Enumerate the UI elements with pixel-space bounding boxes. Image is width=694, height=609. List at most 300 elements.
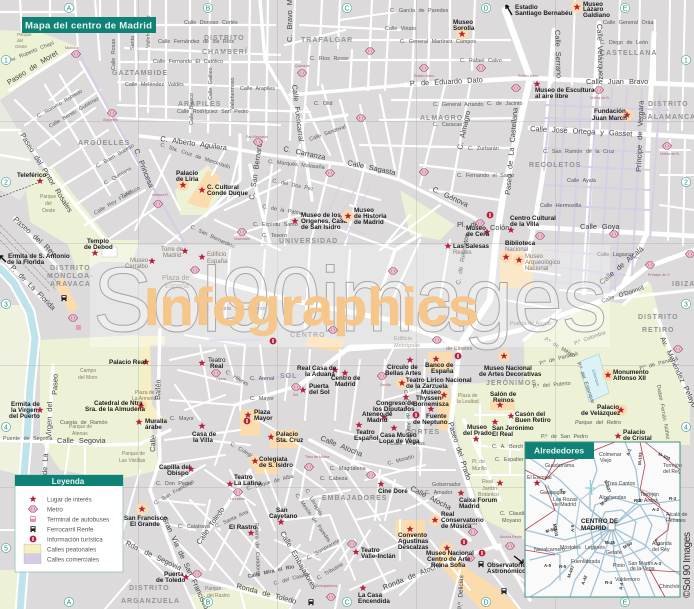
POI: Real Casa de la Aduana [297,365,339,378]
lake Estanque [579,354,609,402]
POI: Museo de Historia: Museo [354,207,374,214]
inset: place names: de la Vega [630,566,655,572]
POI: Puerta del Sol: del Sol [309,389,330,396]
POI: Real Casa de la Aduana: Real Casa de [297,365,337,372]
metro names: Quevedo [295,64,310,68]
inset: road codes: A-5 [544,563,552,568]
minor street names: Atenas [72,431,88,437]
POI: Cultural Conde Duque: Conde Duque [207,190,248,197]
main street names: de La [40,452,50,475]
river Manzanares [0,268,35,609]
minor street names: Parque [17,32,32,37]
POI: San Francisco El Grande: San Francisco [124,515,167,522]
inset: road codes: M-50 [622,540,634,550]
POI: Convento Agustinas Descalzas [398,523,429,551]
main street names: Paseo de La Castellana [503,106,520,195]
minor street names: C. Colegiata [229,442,259,463]
POI: Palacio de Velázquez: Palacio [597,404,619,411]
POI: Cine Doré: Cine Doré [378,488,408,495]
POI: Teatro Valle-Inclán [352,547,396,560]
metro names: Atocha Renfe [500,535,522,539]
district labels: JERÓNIMOS [486,378,537,387]
POI: Caixa Forum Madrid: Caixa Forum [459,497,498,504]
POI: Templo de Debod: Templo [87,238,109,245]
minor street names: C. Claudio [500,511,527,517]
inset: place names: Guadarrama [545,463,574,469]
POI: Las Salesas: Las Salesas [453,243,490,250]
legend: ferrocarril Renfe: Ferrocarril Renfe [47,526,94,534]
grid references: top letters: D [483,5,489,12]
POI: Palacio de Velázquez [581,404,627,417]
POI: Banco de España: Banco de [425,362,454,369]
POI: Muralla árabe [135,418,168,431]
minor street names: C. Caracas [433,122,462,128]
metro names: Ventura R. [152,193,169,197]
minor street names: C. Mayor [250,396,274,402]
minor street names: C. Fernando el Santo [457,173,514,179]
POI: Templo de Debod: de Debod [84,244,113,251]
inset: road codes: R-4 [605,580,613,585]
POI: Ateneo de Madrid: Madrid [367,417,388,424]
minor street names: Edificio [394,336,412,342]
POI: Banco de España [425,353,454,375]
POI: San Jerónimo El Real: San Jerónimo [492,425,534,432]
minor street names: Plaza de [162,275,189,282]
minor street names: Calle Fernández de los Ríos [158,39,234,45]
POI: Centro Cultural de la Villa: Centro Cultural [510,215,556,222]
POI: Banco de España: España [431,368,454,375]
POI: Palacio de Liria [176,170,199,191]
POI: Monumento Alfonso XII: Alfonso XII [613,375,646,382]
inset: place names: Colmenar [599,452,622,458]
POI: Museo de Escultura: Museo de Escultura [535,87,595,94]
legend: calles peatonales: Calles peatonales [47,546,96,554]
inset: place names: Navalcarnero [534,547,565,553]
grid references: side numbers: 3 [684,301,688,308]
minor street names: C. Don Pedro [156,481,193,487]
POI: Teatro Real: Teatro [208,357,226,364]
POI: La Casa Encendida [358,584,390,605]
POI: Real Conservatorio de Música: Real [441,511,455,518]
POI: Casón del Buen Retiro: Casón del [515,411,545,418]
inset: place names: Viejo [600,458,612,464]
minor street names: C. General Martínez Campos [400,39,476,45]
POI: Real Conservatorio de Música [429,511,484,530]
POI: San Cayetano: Cayetano [269,513,297,520]
district labels: CHAMBERÍ [202,47,248,56]
POI: Convento Agustinas Descalzas: Agustinas [398,538,429,545]
POI: Museo de Cera [466,225,491,238]
inset: motorways [525,442,680,597]
inset: road codes: M-607 [603,480,612,494]
minor street names: C. del Dos Pez [272,178,314,193]
grid references: top letters: E [623,5,628,12]
minor street names: Parque del Retiro [575,420,621,426]
inset: road codes: A-42 [580,574,588,585]
POI: Edificio España [198,252,228,265]
POI: Teatro La Latina: Teatro [234,474,253,481]
POI: Observatorio Astronómico [478,556,526,575]
POI: Museo Sorolla: Sorolla [453,25,475,32]
POI: Palacio de Liria: de Liria [176,176,199,183]
district labels: ARAVACA [50,281,91,288]
POI: San Jerónimo El Real [491,418,534,438]
panel: inset map Alrededores [525,442,687,597]
district labels: EMBAJADORES [322,495,387,502]
inset: road codes: R-5 [559,564,567,569]
POI: Ermita Virgen del Puerto: Ermita de [11,401,40,408]
district labels: TRAFALGAR [301,37,353,44]
metro names: Argüelles [103,118,118,122]
POI: Centro de Madrid: Centro de [331,375,361,382]
minor street names: Ribera de Curtidores [253,523,261,577]
minor street names: Calle Huertas [390,441,425,447]
POI: Las Salesas [444,242,490,256]
POI: Teatro La Latina: La Latina [234,480,262,487]
POI: Estadio Santiago Bernabéu: Estadio [515,4,538,11]
POI: Puerta del Sol: Puerta [309,383,329,390]
inset: road codes: A-2 [652,507,660,512]
panel: legend [15,475,123,572]
inset: place names: Valdemoro [615,577,640,583]
POI: Ermita de S. Antonio [0,253,70,266]
metro names: Noviciado [234,237,250,241]
minor street names: Calle Hermosilla [540,203,581,209]
inset: place names: de Madrid [553,502,576,508]
inset: road codes [544,447,677,590]
POI: Real Conservatorio de Música: Conservatorio [441,517,484,524]
minor street names: C. Olid [314,101,332,107]
POI: Torre de Madrid: Madrid [163,253,181,259]
main street names: Virgen del [44,401,54,438]
POI: Casa de la Villa: la Villa [193,437,213,444]
minor street names: C. Romero Robledo [36,89,84,120]
POI: Casón del Buen Retiro [507,411,551,424]
railway lines [0,225,60,292]
POI: Cine Doré [377,480,408,495]
inset: road codes: M-501 [545,526,559,534]
minor street names: C. Lavapiés [303,488,324,518]
district labels: ALMAGRO [420,115,463,122]
POI: Museo Reina Sofía: Reina Sofía [431,562,466,569]
main street names: Calle Juan Bravo [586,77,648,86]
POI: Convento Agustinas Descalzas: Convento [398,532,427,539]
main street names: Calle Atocha [409,484,454,512]
POI: Palacio de Velázquez: de Velázquez [581,410,620,417]
minor street names: P.º de Méjico [543,337,576,359]
POI: Cultural Conde Duque: C. Cultural [207,184,239,191]
POI: Museo Cerralbo: Museo [130,258,149,264]
POI: Salón de Reinos: Reinos [493,397,514,404]
POI: El Rastro: El Rastro [229,524,257,531]
POI: Fuente de Neptuno: Fuente [426,413,447,420]
POI: Ateneo de Madrid: Ateneo de [362,411,393,418]
POI: Biblioteca Nacional: Nacional [505,247,528,253]
minor street names: C. Hileras [224,370,249,388]
POI: Museo de Cera: Museo [466,225,486,232]
main street names: Paseo del Rey [12,215,58,258]
POI: Museo Cerralbo: Cerralbo [125,264,149,270]
minor street names: Santa Cruz [130,21,136,50]
inset: place names: Fuenlabrada [571,559,600,565]
minor street names: Parque [205,586,221,592]
minor street names: C. Mesón de Paredes [293,493,332,544]
POI: Museo Orígenes: Orígenes. Casa [301,218,347,225]
POI: La Casa Encendida: La Casa [358,592,383,599]
legend: información turística: Información turística [47,536,103,544]
POI: Estadio Santiago Bernabéu: Santiago Bernabéu [515,10,573,17]
POI: Museo de Historia: de Madrid [354,219,384,226]
inset: place names: Getafe [606,550,622,556]
POI: La Casa Encendida: Encendida [358,598,390,605]
minor street names: Calle Meléndez Valdés [125,82,184,88]
grid references: bottom letters: B [206,599,211,606]
POI: Palacio Santa Cruz [267,431,303,444]
POI: Capilla del Obispo [159,464,195,477]
POI: Biblioteca Nacional: Arqueológico [525,260,561,266]
district labels: DISTRITO [204,35,245,42]
POI: Salón de Reinos: Salón de [490,391,517,398]
minor street names: Puente de Segovia [3,436,53,442]
POI: Congreso de los Diputados [373,393,415,413]
inset: place names: Galapagar [540,490,564,496]
metro names: Príncipe de V. [648,273,670,277]
inset: place names: San Martín [628,561,653,567]
panel: legend: Leyenda [52,477,85,486]
minor street names: C. del Casino [273,572,310,587]
minor street names: P.º del Estanque [575,362,596,404]
minor street names: Calle Donoso Cortés [184,20,238,26]
minor street names: Las Vistillas [119,458,146,464]
metro names: Rubén Darío [518,74,538,78]
main street names: Paseo del Prado [446,421,473,481]
grid references: bottom letters [64,597,630,607]
cable car line [0,182,40,197]
POI: Museo Orígenes: Museo de los [301,212,341,219]
POI: Museo Lázaro Galdiano [571,1,610,19]
metro names: Tirso de Molina [305,455,329,459]
main street names: P. de La Florida [9,263,58,313]
minor street names: C. Cuesta San Vicente [205,306,265,312]
metro names: Rubén Darío [414,74,434,78]
main street names: Bailén [153,379,163,400]
POI: Ermita de S. Antonio: Ermita de S. Antonio [8,253,70,260]
minor street names: Tutor [120,188,134,200]
metro names: Sol [293,393,298,397]
POI: Teatro Valle-Inclán: Valle-Inclán [361,553,396,560]
POI: Puerta de Toledo: Puerta [164,571,184,578]
POI: Colegiata de S. Isidro: de S. Isidro [259,462,293,469]
inset: road codes: M-45 [605,540,616,545]
inset: water bodies [548,480,595,497]
inset: road codes: R-3 [669,496,677,501]
POI: Palacio de Cristal [614,429,652,442]
grid references: side numbers: 2 [684,179,688,186]
minor street names: Jardín [482,486,497,492]
minor street names: C. de la Palma [262,204,303,217]
minor street names: Calle Fernando El Católico [153,59,223,65]
POI: Ermita de S. Antonio: de la Florida [7,259,45,266]
POI: Ermita Virgen del Puerto [9,401,44,420]
metro names: Ópera [216,376,226,381]
POI: Museo Thyssen: Bornemisza [413,401,449,408]
POI: Museo de Historia [342,207,387,226]
main street names: P. de Eduardo Dato [410,75,483,88]
minor street names: Real [482,479,493,485]
main street names: Gran Vía de San Francisco [160,515,211,609]
main street names: Calle Segovia [57,436,106,445]
minor street names: C. Buen Suceso [95,143,135,170]
grid references: side numbers: 4 [684,424,688,431]
grid references: top letters: A [67,5,72,12]
POI: Museo del Prado [463,424,492,442]
main street names: Calle de Alcalá [598,244,646,287]
minor street names: C. A. Borch [492,444,523,450]
minor street names: P.º de Panamá [639,356,679,372]
grid references: top letters [64,3,630,13]
inset: road codes: M-407 [566,564,575,578]
inset: header: Alrededores [534,446,584,456]
POI: transport terminals [61,295,507,605]
minor street names: C. Espalter [495,457,524,463]
minor street names: C. Espíritu Santo [253,222,298,228]
district labels: RETIRO [642,327,674,334]
inset: star El Escorial [533,479,541,486]
POI: Museo Sorolla [453,19,475,40]
POI: Observatorio Astronómico: Observatorio [487,562,526,569]
POI: San Cayetano: San [276,507,288,514]
minor street names: P.º de Panamá [539,351,579,367]
metro names: Moncloa [65,46,79,50]
inset: place names: Henares [666,518,686,524]
inset: place names [527,452,687,590]
inset: place names: Alcobendas [599,495,627,501]
POI: Fuente de Neptuno: de Neptuno [413,419,448,426]
district labels: CENTRO [290,332,326,339]
POI: Museo Thyssen [413,389,450,408]
POI: Puerta del Sol [299,383,330,396]
POI: Palacio de Cristal: Palacio [623,429,645,436]
POI: Convento Agustinas Descalzas: Descalzas [398,544,429,551]
POI: Museo Cerralbo [125,257,156,270]
inset: place names: Torrejón [640,492,659,498]
POI: Centro Cultural de la Villa: de la Villa [510,221,539,228]
district labels: DISTRITO [648,101,689,108]
grid references: side numbers: 3 [4,301,8,308]
metro names: Embajadores [316,584,337,588]
minor street names: España [165,283,189,290]
commercial streets in Salamanca and Princesa [78,52,668,380]
POI: Casa de la Villa: Casa de [192,431,217,438]
district labels: ARGÜELLES [78,138,130,147]
metro names: Sevilla [380,383,391,387]
minor street names: Parque de [122,451,145,457]
grid references: top letters: B [206,5,211,12]
POI: Teatro Español: Español [354,435,379,442]
minor street names: Vallehermoso [230,77,236,110]
POI: Edificio España: España [207,259,228,265]
POI: Monumento Alfonso XII [602,369,649,382]
minor street names: La Armería [132,396,157,402]
minor street names: Calle Lagasca [597,252,633,258]
minor street names: C. García de Paredes [390,8,448,14]
POI: Teatro Español: Teatro [356,429,375,436]
POI: Palacio Real: Palacio Real [109,359,146,366]
main street names: C. Carranza [283,144,327,162]
POI: Fundación Juan March: Juan March [592,115,627,122]
POI: Centro Cultural de la Villa [507,215,556,233]
watermark: grey outline lettering: Sol90images [93,249,607,351]
inset: place names: del Rey [652,547,670,553]
POI: Museo Reina Sofía: Museo Nacional [426,550,474,557]
POI: Teleférico [17,172,46,184]
district labels: DISTRITO [50,265,91,272]
minor street names: C. Calatrava [178,524,210,530]
inset: place names: Pinto [613,563,625,569]
POI: Teleférico: Teleférico [17,172,46,179]
POI: Jardín Botánico star [496,479,504,486]
minor street names: Plaza de [135,390,155,396]
pedestrian streets and monuments [55,170,532,609]
minor street names: C. Rafael Calvo [460,58,502,64]
POI: Puerta de Toledo [156,571,190,584]
POI: Museo Orígenes [291,212,347,231]
POI: Fundación Juan March: Fundación [594,108,626,115]
main street names: Calle Atocha [319,434,365,459]
POI: Museo de Historia: de Historia [354,213,387,220]
POI: Museo Lázaro Galdiano: Galdiano [583,12,610,19]
minor street names: C. Magdalena [330,466,366,472]
main street names: C. Princesa [132,147,156,190]
minor street names: Calle Rodríguez San Pedro [177,109,249,115]
main street names: Calle Goya [580,222,620,231]
main street names: C. San Bernardo [247,139,264,200]
minor street names: C. Tribulete [316,562,345,582]
POI: Torre de Madrid: Torre de [161,247,184,253]
POI: Las Salesas: Reales [453,250,472,256]
POI: Caixa Forum Madrid [457,489,498,510]
POI: Monumento Alfonso XII: Monumento [613,369,649,376]
POI: Teatro Lírico Nacional [396,377,472,390]
grid references: side numbers: 1 [684,57,688,64]
white haze behind watermark [90,245,610,347]
metro names: Núñez de B. [660,152,680,156]
legend: calles comerciales: Calles comerciales [47,556,99,564]
minor street names: Oeste [15,44,28,49]
minor street names: Moyano [502,518,521,524]
main street names: Calle O'Donnell [601,285,645,305]
POI: Casa Museo Lope de Vega [379,424,420,445]
minor street names: Metrópolis [394,343,420,349]
inset: road codes: A-1 [625,447,633,456]
inset: place names: Arganda [652,541,672,547]
district labels: MONCLOA- [47,273,94,280]
minor street names: C. de Jacinto [487,101,522,107]
POI: Museo de Escultura: al aire libre [535,93,569,100]
grid references: bottom letters: D [483,599,489,606]
POI: Teatro Español [354,421,379,442]
main street names: Ronda de Atocha [381,560,444,592]
inset: road codes: M-40 [599,496,610,507]
inset: place names: Leganés [585,545,605,551]
minor street names: C. Amador [425,490,453,496]
inset: place names: Tres Cantos [607,481,635,487]
POI: Museo Reina Sofía: Centro de Arte [427,556,471,563]
POI: Catedral de la Almudena: Catedral de Ntra [94,400,143,407]
district labels: SOL [280,373,297,380]
inset: road codes: M-103 [637,452,643,465]
minor street names: Calle Arapiles [240,86,275,92]
